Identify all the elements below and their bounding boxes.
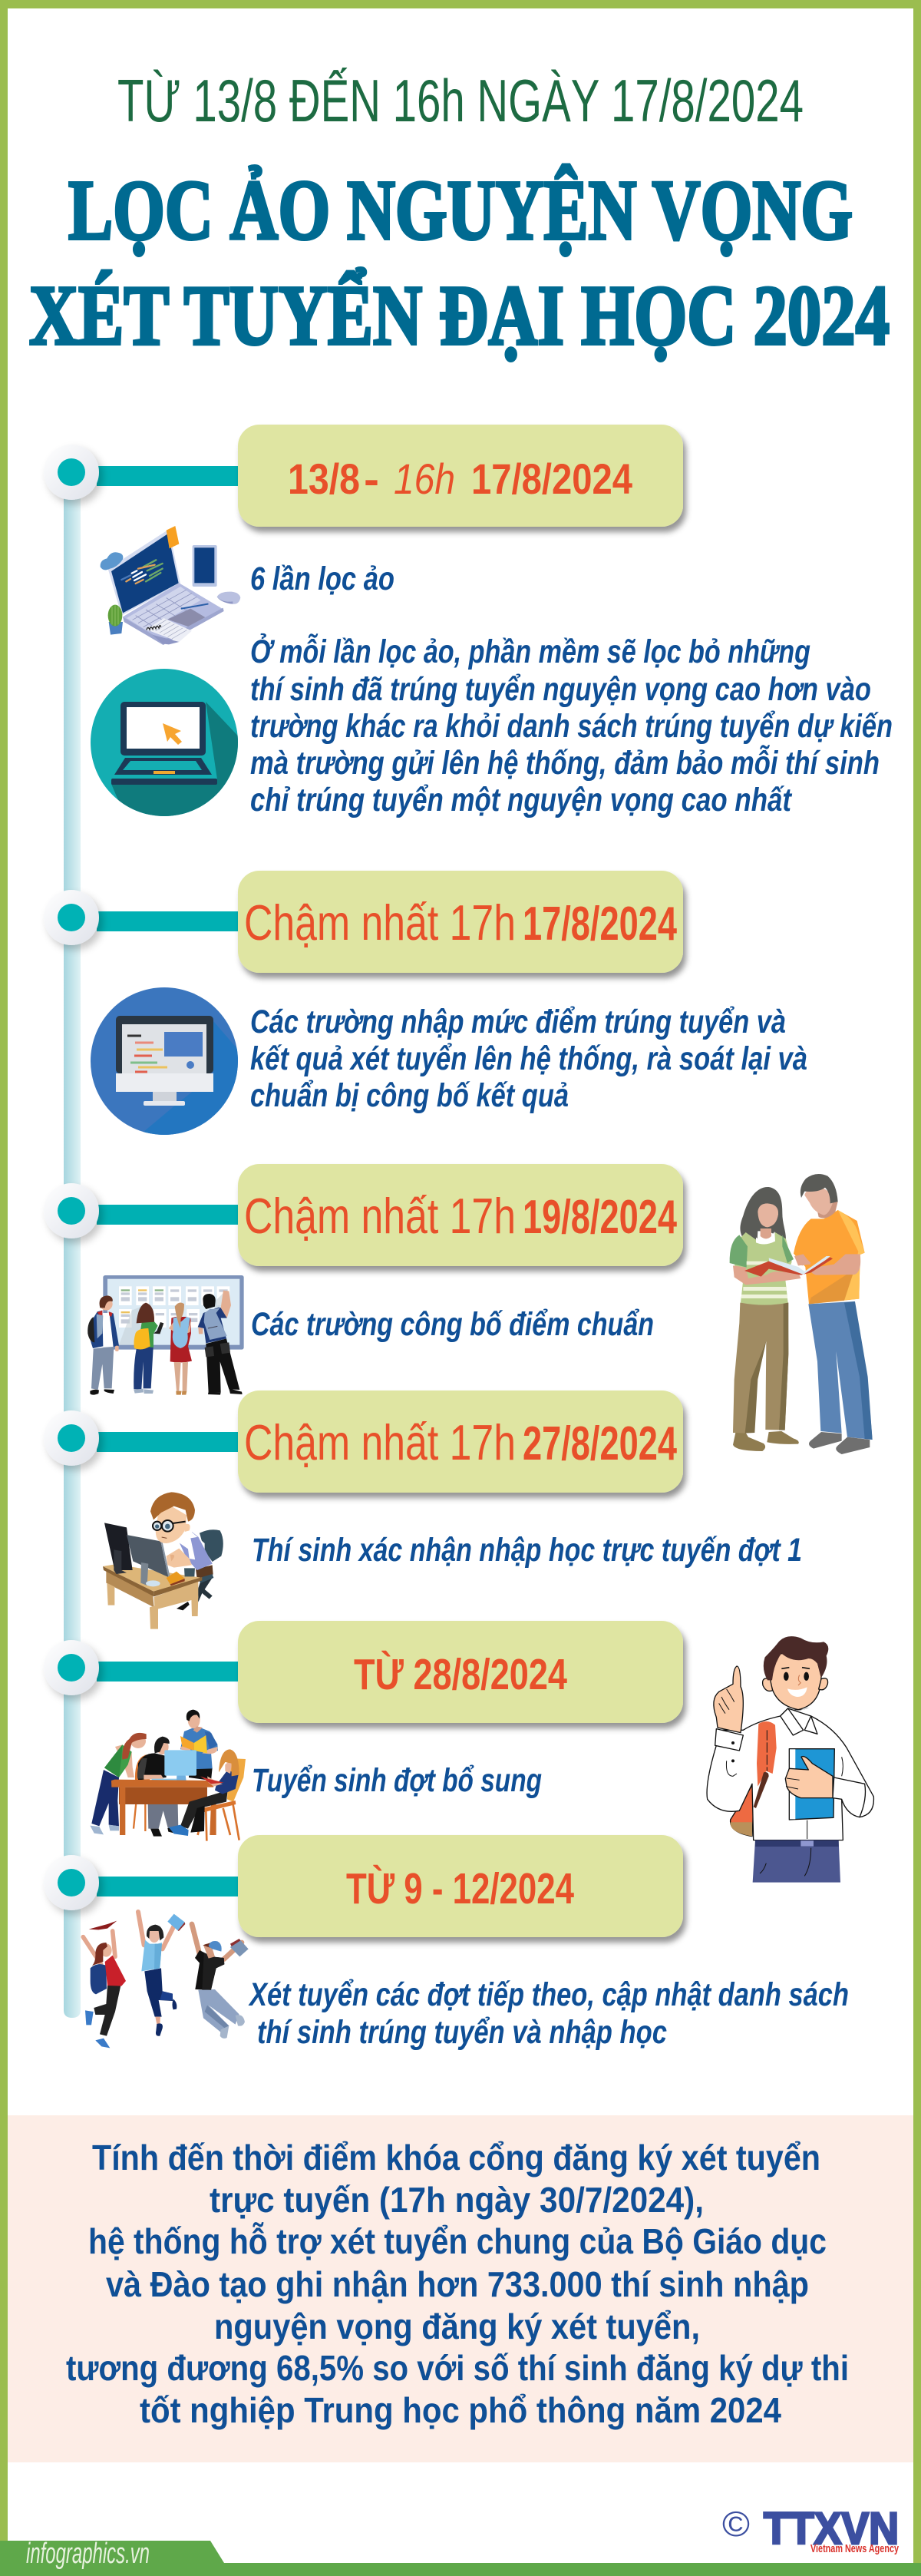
illustration: students at notice board: [87, 1275, 244, 1395]
panel: summary callout: trực tuyến (17h ngày 30/7/2024),: [210, 2180, 704, 2220]
logo: TTXVN: TTXVN: [764, 2504, 899, 2554]
icon: teal laptop circle: [91, 669, 238, 816]
timeline step 2: Chậm nhất 17h: [244, 894, 516, 951]
text: further rounds: [248, 1976, 849, 2051]
timeline step 1: 13/8: [288, 455, 360, 503]
text: 6 filter rounds: 6 lần lọc ảo: [250, 561, 394, 597]
text: supplementary admission: Tuyển sinh đợt bổ sung: [252, 1762, 542, 1799]
footer bar: [0, 2538, 921, 2576]
timeline step 4: 27/8/2024: [523, 1417, 677, 1470]
title: [29, 164, 890, 363]
panel: summary callout: hệ thống hỗ trợ xét tuyển chung của Bộ Giáo dục: [88, 2221, 827, 2261]
logo: TTXVN: ©: [722, 2504, 750, 2544]
panel: summary callout: Tính đến thời điểm khóa cổng đăng ký xét tuyển: [92, 2138, 820, 2178]
timeline step 5: [44, 1621, 683, 1723]
text: schools enter scores: Các trường nhập mức điểm trúng tuyển và: [250, 1004, 786, 1040]
timeline step 3: Chậm nhất 17h: [244, 1188, 516, 1244]
panel: summary callout: và Đào tạo ghi nhận hơn 733.000 thí sinh nhập: [106, 2264, 809, 2304]
timeline step 1: 16h: [394, 455, 455, 503]
timeline step 2: [44, 871, 683, 973]
timeline step 1: 17/8/2024: [471, 455, 632, 503]
icon: blue monitor circle: [91, 987, 238, 1135]
timeline step 3: [44, 1164, 683, 1266]
timeline step 6: [44, 1835, 683, 1937]
text: schools enter scores: [250, 1004, 807, 1114]
text: further rounds: thí sinh trúng tuyển và nhập học: [257, 2014, 667, 2051]
timeline step 1: [44, 425, 683, 527]
illustration: boy pointing with book: [707, 1636, 873, 1883]
timeline step 5: TỪ 28/8/2024: [354, 1650, 567, 1699]
timeline step 4: Chậm nhất 17h: [244, 1414, 516, 1470]
text: schools publish cut-off scores: Các trường công bố điểm chuẩn: [251, 1306, 654, 1343]
timeline step 1: -: [364, 455, 379, 503]
text: filter explanation: [250, 633, 893, 818]
timeline step 3: 19/8/2024: [523, 1191, 677, 1244]
panel: summary callout: nguyện vọng đăng ký xét tuyển,: [214, 2306, 700, 2346]
illustration: jumping students: [83, 1912, 249, 2048]
icon: isometric laptop: [101, 526, 240, 645]
panel: summary callout: tốt nghiệp Trung học phổ thông năm 2024: [140, 2390, 781, 2430]
illustration: students around a table: [90, 1710, 246, 1841]
footer bar: infographics.vn: [26, 2538, 150, 2570]
panel: summary callout: [8, 2115, 913, 2462]
illustration: two students reading: [730, 1174, 873, 1454]
timeline vertical line: [64, 472, 81, 2018]
timeline step 2: 17/8/2024: [523, 898, 677, 951]
illustration: student at desk: [103, 1492, 223, 1629]
text: schools enter scores: chuẩn bị công bố kết quả: [250, 1077, 569, 1114]
timeline step 6: TỪ 9 - 12/2024: [346, 1864, 574, 1913]
timeline step 4: [44, 1391, 683, 1493]
text: filter explanation: chỉ trúng tuyển một nguyện vọng cao nhất: [250, 782, 792, 818]
